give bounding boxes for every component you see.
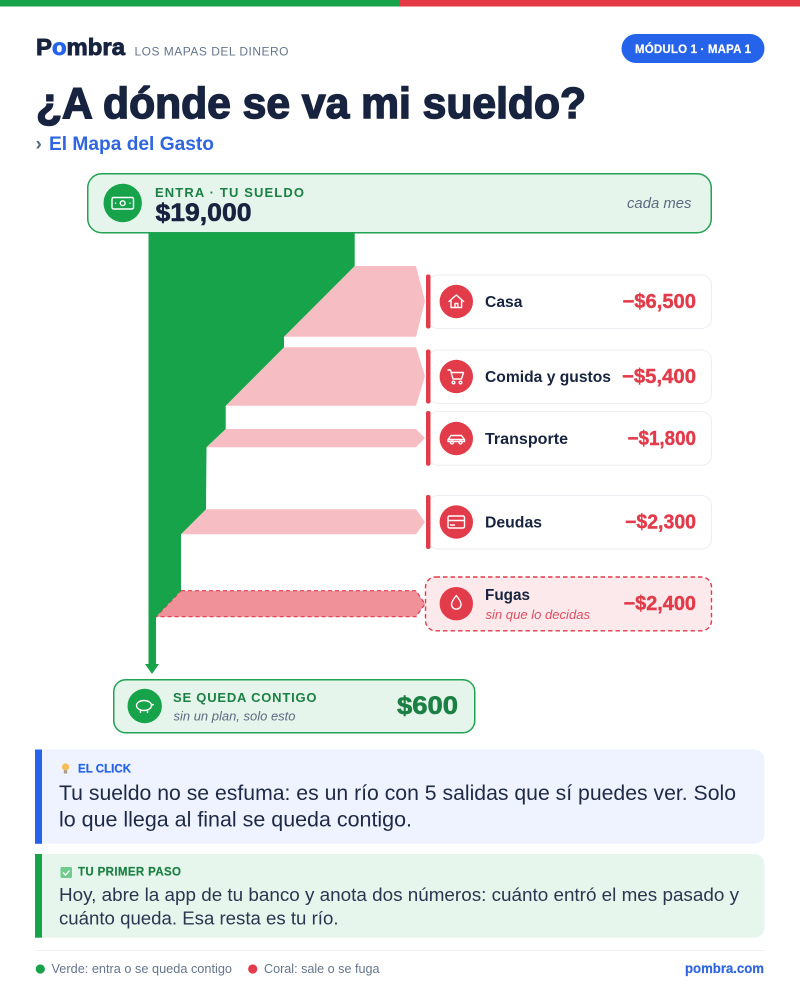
remainder note: sin un plan, solo esto	[174, 710, 296, 724]
income card	[88, 174, 711, 233]
income river	[145, 233, 355, 674]
expense card: casa: −$6,500	[622, 291, 696, 313]
brand logo: Pombra	[36, 34, 126, 60]
subtitle: El Mapa del Gasto	[49, 133, 214, 155]
expense card: deudas: −$2,300	[625, 512, 696, 534]
expense card: comida y gustos	[426, 350, 712, 404]
income amount: $19,000	[156, 199, 252, 227]
callout: el click: Tu sueldo no se esfuma: es un río con 5 salidas que sí puedes ver. Solo	[59, 782, 736, 805]
top colour bar	[0, 0, 800, 6]
callout: el click	[35, 750, 764, 844]
module badge: MÓDULO 1 · MAPA 1	[635, 43, 752, 56]
module badge	[622, 34, 764, 63]
website link text: pombra.com	[685, 961, 764, 976]
expense card: transporte: −$1,800	[628, 428, 696, 450]
leak band: fugas	[156, 591, 425, 617]
expense card: deudas	[426, 495, 712, 549]
expense card: transporte: Transporte	[485, 431, 568, 448]
expense band: transporte	[207, 429, 425, 447]
expense band: comida y gustos	[226, 347, 425, 406]
expense band: deudas	[181, 509, 425, 534]
icon: banknote	[104, 184, 142, 222]
icon: shopping cart	[440, 360, 473, 393]
subtitle: ›	[36, 134, 42, 155]
callout: el click: lo que llega al final se queda contigo.	[59, 809, 412, 832]
icon: water drop	[440, 587, 473, 620]
leak card: fugas: Fugas	[485, 587, 530, 604]
expense card: deudas: Deudas	[485, 514, 542, 532]
expense card: casa: Casa	[485, 294, 523, 311]
callout: tu primer paso	[35, 854, 764, 938]
leak card: fugas	[426, 577, 712, 631]
icon: light bulb	[62, 763, 69, 774]
expense card: comida y gustos: −$5,400	[622, 366, 696, 388]
legend: Coral: sale o se fuga	[264, 962, 380, 976]
icon: credit card	[440, 505, 473, 539]
income period note: cada mes	[627, 196, 692, 212]
callout: tu primer paso: TU PRIMER PASO	[78, 867, 181, 879]
expense card: casa	[426, 274, 712, 328]
income label: ENTRA · TU SUELDO	[155, 185, 304, 200]
callout: tu primer paso: cuánto queda. Esa resta es tu río.	[59, 908, 338, 928]
leak card: fugas: sin que lo decidas	[486, 608, 590, 622]
leak card: fugas: −$2,400	[624, 593, 696, 615]
callout: el click: EL CLICK	[78, 764, 132, 776]
icon: check mark	[60, 867, 72, 878]
callout: tu primer paso: Hoy, abre la app de tu banco y anota dos números: cuánto entró el mes pasado y	[59, 885, 739, 905]
remainder amount: $600	[397, 692, 458, 720]
title: ¿A dónde se va mi sueldo?	[36, 79, 586, 128]
icon: car	[440, 422, 473, 455]
icon: piggy bank	[128, 689, 162, 723]
sankey flow chart	[145, 233, 425, 674]
brand tagline: LOS MAPAS DEL DINERO	[134, 44, 288, 58]
expense card: transporte	[426, 411, 712, 466]
legend	[36, 962, 380, 976]
remainder card	[114, 680, 475, 733]
expense card: comida y gustos: Comida y gustos	[485, 369, 611, 386]
remainder label: SE QUEDA CONTIGO	[173, 690, 316, 705]
legend: Verde: entra o se queda contigo	[52, 962, 232, 976]
icon: house	[440, 285, 473, 318]
expense band: casa	[284, 266, 425, 337]
